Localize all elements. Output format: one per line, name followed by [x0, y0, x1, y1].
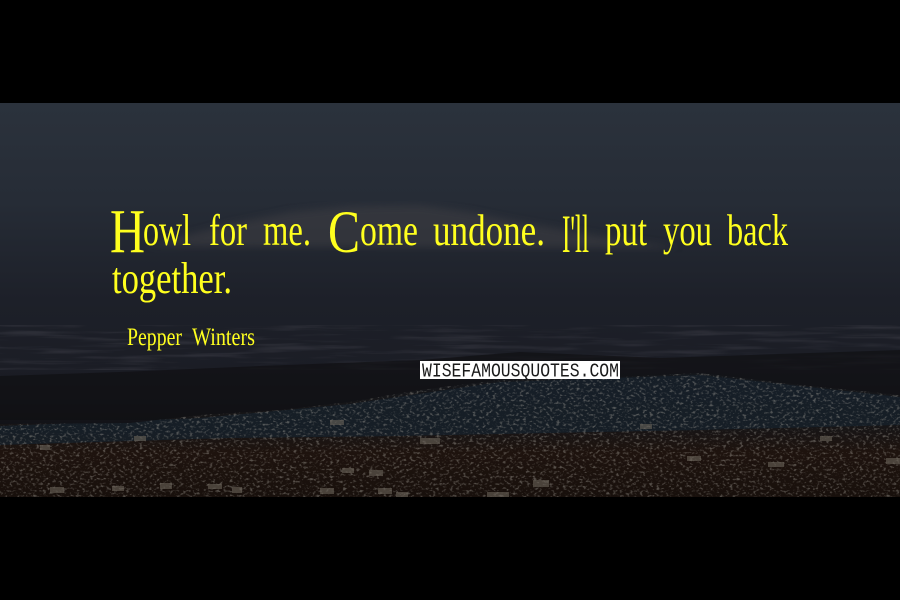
watermark: WISEFAMOUSQUOTES.COM	[422, 360, 619, 382]
line 1: ome	[360, 206, 418, 255]
distant snowy mountain	[145, 205, 680, 248]
line 1: C	[328, 199, 360, 265]
line 1	[110, 198, 788, 266]
hillside town	[0, 370, 900, 497]
light rooftops	[40, 420, 900, 497]
haze streaks on the plain	[0, 325, 900, 370]
author: Winters	[192, 324, 255, 351]
background photo panel	[0, 103, 900, 497]
line 1: undone.	[433, 206, 545, 255]
quote text	[110, 198, 788, 303]
line 1: for	[209, 206, 247, 255]
author: Pepper	[127, 324, 183, 351]
line 2: together.	[112, 254, 232, 303]
line 1: me.	[263, 206, 311, 255]
line 1: you	[663, 206, 712, 255]
line 1: put	[605, 206, 647, 255]
line 1: owl	[143, 206, 191, 255]
line 1: back	[727, 206, 788, 255]
author	[127, 324, 255, 351]
dark ridge	[0, 350, 900, 420]
line 1: I'll	[562, 204, 589, 264]
line 1: H	[110, 198, 145, 266]
